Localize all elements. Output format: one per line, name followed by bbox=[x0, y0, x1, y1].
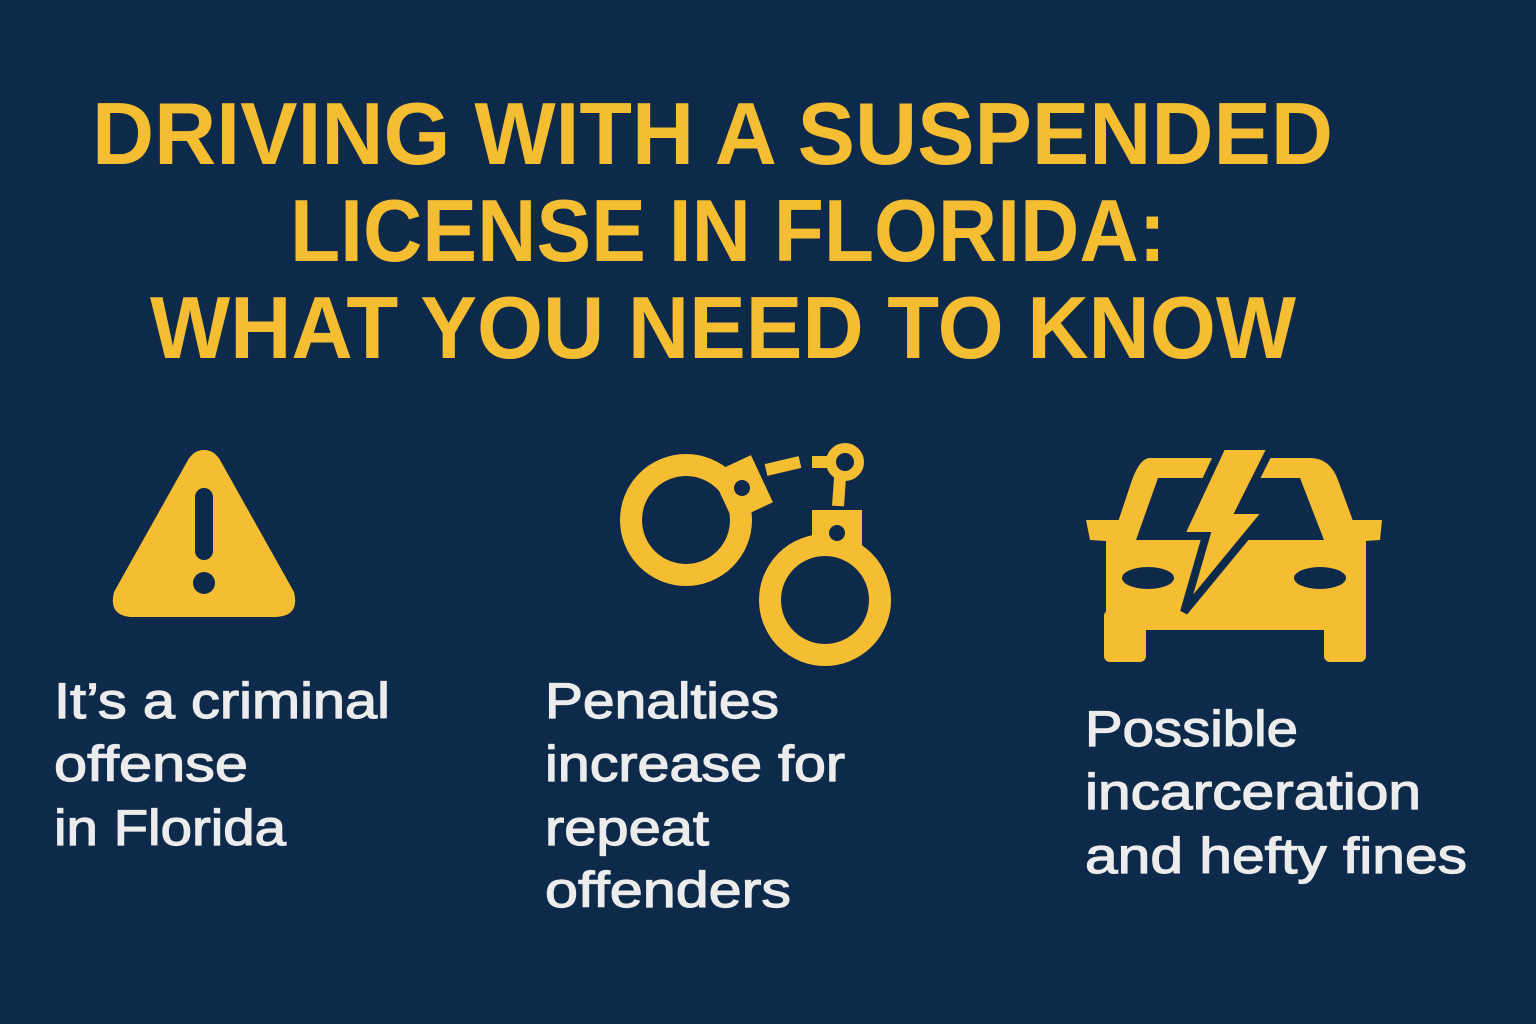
text: column 1: in Florida bbox=[54, 800, 286, 856]
text: column 3: incarceration bbox=[1085, 764, 1421, 820]
title: WHAT YOU NEED TO KNOW bbox=[150, 278, 1296, 377]
text: column 2: increase for bbox=[545, 736, 845, 792]
text: column 3 bbox=[1085, 701, 1467, 884]
text: column 2: Penalties bbox=[545, 673, 779, 729]
text: column 2 bbox=[545, 673, 845, 918]
text: column 1: offense bbox=[54, 736, 248, 792]
text: column 1 bbox=[54, 673, 390, 856]
text blocks bbox=[54, 673, 1467, 918]
title: LICENSE IN FLORIDA: bbox=[290, 181, 1166, 280]
text: column 1: It’s a criminal bbox=[54, 673, 390, 729]
text: column 3: Possible bbox=[1085, 701, 1298, 757]
icon: warning triangle bbox=[113, 450, 295, 617]
title: DRIVING WITH A SUSPENDED bbox=[92, 84, 1333, 183]
text: column 3: and hefty fines bbox=[1085, 828, 1467, 884]
text: column 2: repeat bbox=[545, 800, 709, 856]
icon: handcuffs bbox=[631, 448, 880, 655]
text: column 2: offenders bbox=[545, 862, 791, 918]
title bbox=[92, 84, 1333, 377]
icon: car with lightning bbox=[1086, 446, 1382, 662]
